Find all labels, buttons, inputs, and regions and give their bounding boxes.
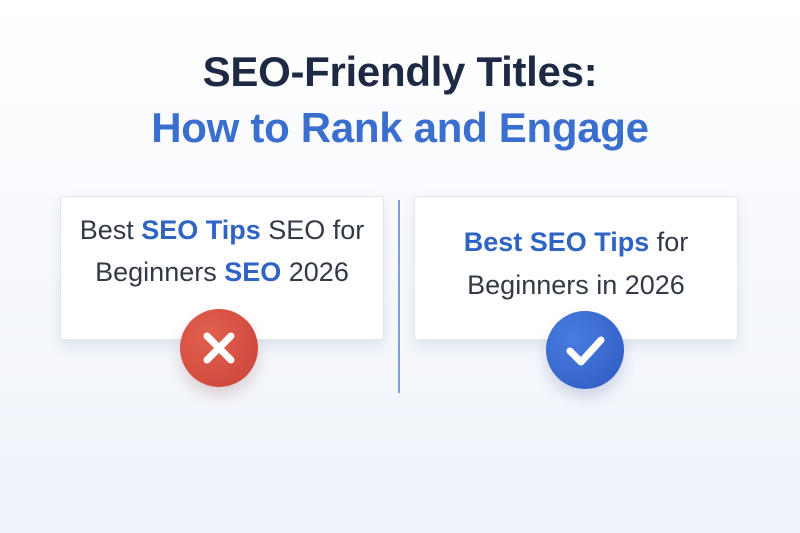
divider (398, 200, 400, 393)
title line 1: SEO-Friendly Titles: (203, 48, 597, 95)
panel: bad title (60, 196, 384, 340)
bad title text: Beginners SEO 2026 (95, 257, 349, 287)
bad title text (80, 215, 364, 287)
good title text: Best SEO Tips for (464, 227, 688, 257)
good title text: Beginners in 2026 (467, 270, 685, 300)
title line 2: How to Rank and Engage (151, 104, 649, 151)
panel: good title (414, 196, 738, 340)
good title text (464, 227, 688, 300)
icon: red cross (180, 309, 258, 387)
icon: blue check (546, 311, 624, 389)
bad title text: Best SEO Tips SEO for (80, 215, 364, 245)
